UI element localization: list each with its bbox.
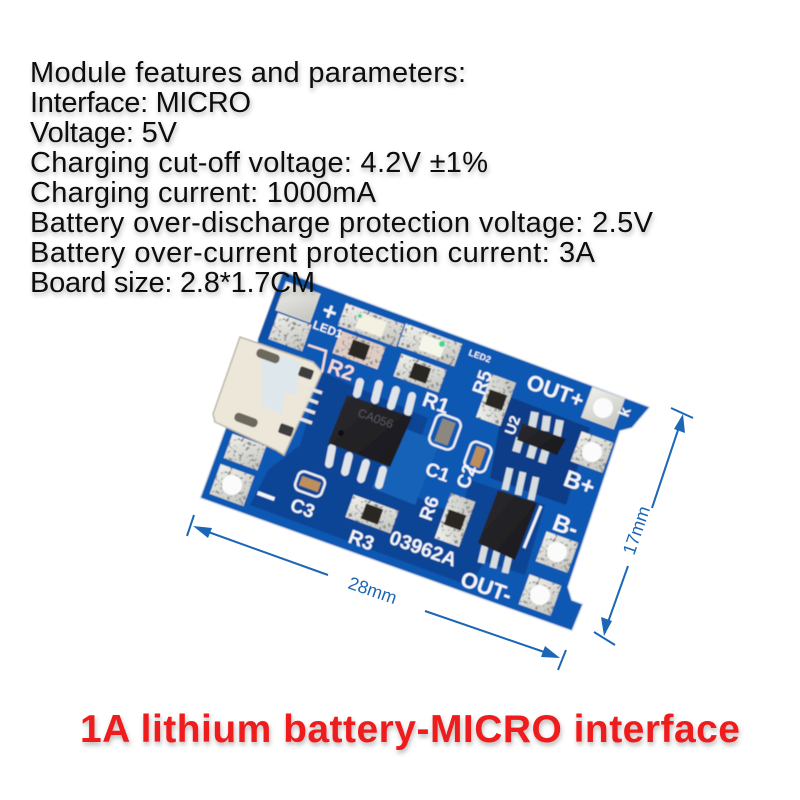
board silkscreen labels: R5: [469, 367, 497, 398]
board silkscreen labels: OUT-: [457, 566, 515, 608]
text block: module features and parameters: Battery over-discharge protection voltage: 2.5V: [30, 207, 654, 239]
icon: protection chip: [478, 468, 541, 573]
text block: module features and parameters: Charging cut-off voltage: 4.2V ±1%: [30, 147, 488, 179]
icon: main chip: [328, 382, 412, 485]
board silkscreen labels: 03962A: [386, 527, 460, 572]
text block: module features and parameters: Board size: 2.8*1.7CM: [30, 267, 315, 299]
text block: module features and parameters: Module features and parameters:: [30, 57, 466, 89]
board silkscreen labels: C1: [422, 459, 453, 487]
board silkscreen labels: R6: [416, 494, 444, 524]
text block: module features and parameters: Charging current: 1000mA: [30, 177, 377, 209]
board silkscreen labels: OUT+: [523, 369, 588, 413]
board silkscreen labels: U2: [502, 414, 524, 437]
icon: main chip: CA056: [356, 406, 396, 431]
icon: LED1: [338, 303, 404, 347]
board silkscreen labels: LED1: [311, 318, 345, 341]
text block: module features and parameters: [30, 57, 654, 299]
board silkscreen labels: C3: [287, 495, 317, 523]
board silkscreen labels: R1: [419, 388, 453, 419]
text block: module features and parameters: Battery over-current protection current: 3A: [30, 237, 596, 269]
board silkscreen labels: k: [616, 405, 635, 419]
icon: resistors: [332, 331, 516, 547]
board silkscreen labels: R2: [324, 355, 357, 386]
icon: capacitors: [293, 413, 493, 498]
board body: [200, 271, 650, 631]
board silkscreen labels: +: [318, 296, 341, 328]
board silkscreen labels: [257, 296, 635, 608]
icon: solder pads: [210, 282, 624, 616]
label: 28mm: 28mm: [346, 573, 399, 608]
text block: module features and parameters: Voltage: 5V: [30, 117, 178, 149]
arrow: 28mm width dimension: [187, 515, 566, 670]
panel: circuit board: [200, 271, 650, 631]
board silkscreen labels: C2: [453, 462, 481, 492]
label: 17mm: 17mm: [619, 504, 654, 557]
icon: micro USB connector: [213, 337, 322, 455]
title: red caption: 1A lithium battery-MICRO interface: [80, 708, 740, 751]
board silkscreen labels: R3: [345, 526, 377, 555]
icon: LED2: [398, 323, 462, 367]
copper traces: [250, 290, 590, 586]
board silkscreen labels: B+: [560, 465, 599, 501]
arrow: 17mm height dimension: [594, 408, 693, 645]
text block: module features and parameters: Interface: MICRO: [30, 87, 251, 119]
icon: U2 transistor chip: [516, 412, 566, 463]
board silkscreen labels: LED2: [467, 347, 492, 365]
board silkscreen labels: B-: [549, 509, 582, 543]
